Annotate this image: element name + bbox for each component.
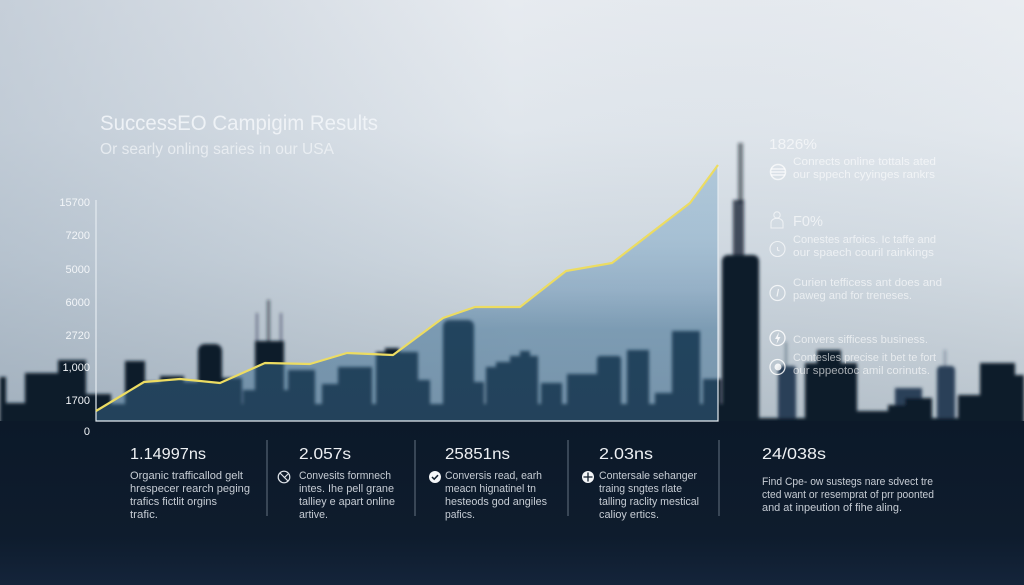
- stat column 2: 2.057s: [299, 446, 351, 463]
- stat column 4: calioy ertics.: [599, 509, 659, 521]
- metric: F0%: [770, 212, 936, 259]
- y axis labels: 5000: [66, 264, 90, 276]
- stat column 1: 1.14997ns: [130, 446, 206, 463]
- metric: F0%: F0%: [793, 213, 823, 230]
- y axis labels: 1700: [66, 395, 90, 407]
- stat column 4: 2.03ns: [599, 446, 653, 463]
- text block: precision note: Contesles precise it bet te fort: [793, 352, 936, 364]
- icon: check badge: [429, 471, 441, 483]
- stat column 4: talling raclity mestical: [599, 496, 699, 508]
- stat column 3: [429, 446, 547, 521]
- text block: precision note: our sppeotoc amil corinuts.: [793, 365, 930, 377]
- icon: plus badge: [582, 471, 594, 483]
- stat column 4: Contersale sehanger: [599, 470, 697, 482]
- y axis labels: 0: [84, 426, 90, 438]
- stat column 2: intes. Ihe pell grane: [299, 483, 394, 495]
- area line chart: [59, 165, 718, 438]
- stat column 2: Convesits formnech: [299, 470, 391, 482]
- panel: bottom statistics: [130, 446, 934, 521]
- y axis labels: 15700: [59, 197, 90, 209]
- title: SuccessEO Campigim Results: [100, 112, 378, 135]
- y axis labels: [59, 197, 90, 438]
- text block: business note: Convers sifficess business.: [793, 334, 928, 346]
- stat column 4: traing sngtes rlate: [599, 483, 682, 495]
- stat column 2: [278, 446, 395, 521]
- stat column 5: [762, 446, 934, 514]
- footer dark band: [0, 421, 1024, 585]
- chart axes: [96, 165, 718, 421]
- icon: info circle: [770, 286, 785, 300]
- stat column 3: meacn hignatinel tn: [445, 483, 536, 495]
- stat column 1: Organic trafficallod gelt: [130, 470, 243, 482]
- subtitle: Or searly onling saries in our USA: [100, 141, 335, 158]
- text block: efficiency note: Curien tefficess ant does and: [793, 277, 942, 289]
- city skyline silhouette: [0, 143, 1024, 430]
- text block: precision note: [770, 352, 936, 377]
- y axis labels: 1,000: [62, 362, 90, 374]
- icon: bolt: [770, 330, 785, 346]
- stat column 2: artive.: [299, 509, 328, 521]
- metric: F0%: our spaech couril rainkings: [793, 247, 935, 259]
- y axis labels: 6000: [66, 297, 90, 309]
- metric: 1826%: [769, 136, 936, 181]
- stat column 1: [130, 446, 250, 521]
- stat column 3: pafics.: [445, 509, 475, 521]
- y axis labels: 7200: [66, 230, 90, 242]
- stat column 3: hesteods god angiles: [445, 496, 547, 508]
- chart area fill: [96, 165, 718, 421]
- icon: clock: [770, 242, 785, 256]
- stat column 5: cted want or resemprat of prr poonted: [762, 489, 934, 501]
- stat column 1: trafic.: [130, 509, 158, 521]
- metric: F0%: Conestes arfoics. Ic taffe and: [793, 234, 936, 246]
- stat column 5: 24/038s: [762, 446, 826, 463]
- stat column 1: hrespecer rearch peging: [130, 483, 250, 495]
- stat column 5: and at inpeution of fihe aling.: [762, 502, 902, 514]
- stat column 3: Conversis read, earh: [445, 470, 542, 482]
- y axis labels: 2720: [66, 330, 90, 342]
- metric: 1826%: Conrects online tottals ated: [793, 156, 936, 168]
- icon: database: [770, 164, 786, 180]
- yellow trend line: [96, 165, 718, 411]
- text block: business note: [770, 330, 928, 346]
- metric: 1826%: 1826%: [769, 136, 817, 153]
- icon: drop circle: [770, 360, 785, 374]
- icon: crossed circle: [278, 471, 290, 483]
- stat column 5: Find Cpe- ow sustegs nare sdvect tre: [762, 476, 933, 488]
- sky background: [0, 0, 1024, 430]
- icon: people: [771, 212, 783, 228]
- stat column 3: 25851ns: [445, 446, 510, 463]
- text block: efficiency note: paweg and for treneses.: [793, 290, 912, 302]
- metric: 1826%: our sppech cyyinges rankrs: [793, 169, 936, 181]
- text block: efficiency note: [770, 277, 942, 302]
- stat column 1: trafics fictlit orgins: [130, 496, 217, 508]
- stat column 2: talliey e apart online: [299, 496, 395, 508]
- stat column 4: [582, 446, 699, 521]
- panel: right side metrics: [769, 136, 942, 377]
